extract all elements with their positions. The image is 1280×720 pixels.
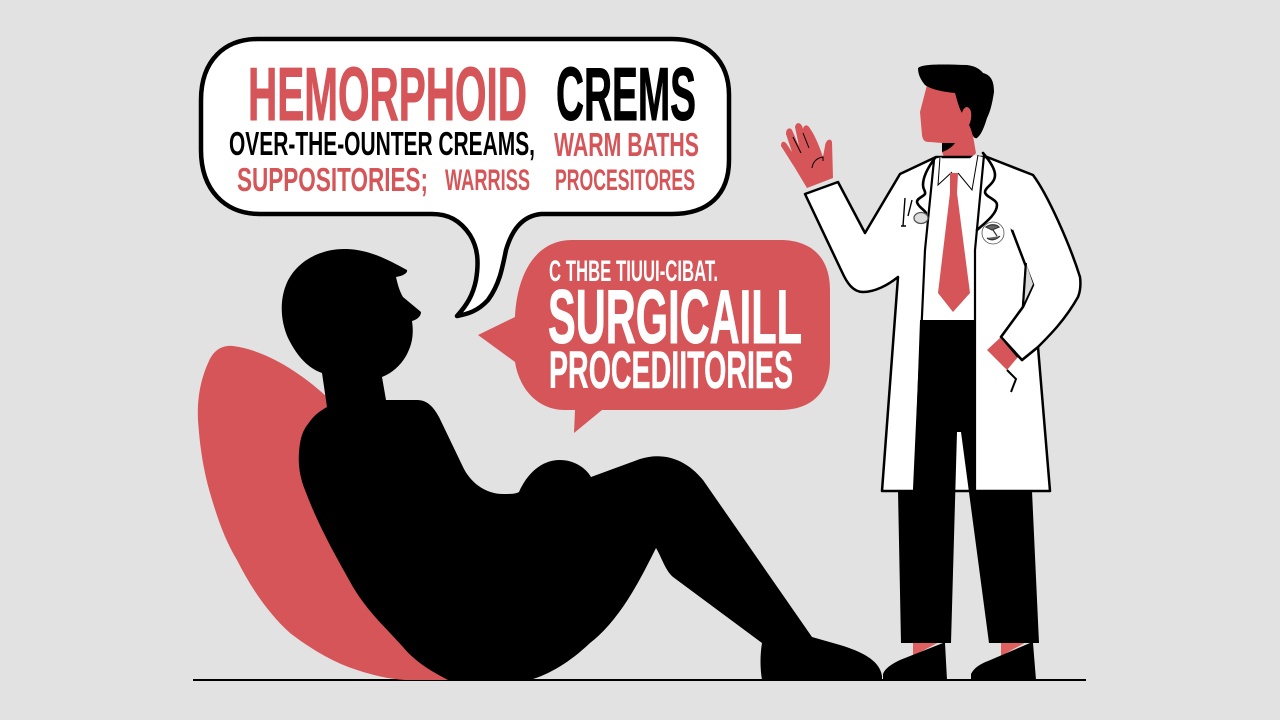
red speech bubble xyxy=(478,240,830,433)
doctor socks xyxy=(913,640,1030,656)
doctor beard xyxy=(942,143,955,152)
doctor hair xyxy=(918,64,994,138)
white bubble shape xyxy=(201,39,729,316)
tie xyxy=(938,173,970,312)
doctor neck and face xyxy=(920,80,985,175)
coat pocket pens xyxy=(901,198,912,226)
text: warm baths: WARM BATHS xyxy=(554,126,699,163)
heading: surgicaill: SURGICAILL xyxy=(548,275,802,360)
cuff and pocket line xyxy=(1001,337,1018,392)
white speech bubble xyxy=(201,39,729,316)
doctor coat xyxy=(805,157,1050,491)
coat right sleeve outline xyxy=(987,157,1080,360)
collar xyxy=(938,155,978,190)
palm lines xyxy=(793,133,823,168)
doctor hand in pocket xyxy=(987,337,1018,370)
heading: procediitories: PROCEDIITORIES xyxy=(549,341,793,400)
coat right sleeve xyxy=(985,157,1080,360)
stethoscope xyxy=(917,153,997,230)
text: procesitores: PROCESITORES xyxy=(555,164,695,197)
doctor raised hand xyxy=(781,123,833,188)
red bubble shape xyxy=(478,240,830,433)
doctor figure xyxy=(781,64,1080,680)
text: over-the-counter creams: OVER-THE-OUNTER CREAMS, xyxy=(229,125,535,162)
ground line xyxy=(193,679,1086,681)
coat badge xyxy=(982,222,1004,244)
text: suppositories: SUPPOSITORIES; xyxy=(237,161,428,198)
shirt xyxy=(920,155,983,320)
heading: hemorphoid: HEMORPHOID xyxy=(248,52,527,136)
patient silhouette xyxy=(282,249,882,680)
text: small line: C THBE TIUUI-CIBAT. xyxy=(549,255,718,288)
stethoscope chest piece xyxy=(914,212,928,224)
red cushion xyxy=(198,346,448,680)
doctor shoes xyxy=(883,643,1036,680)
heading: crems: CREMS xyxy=(556,52,696,136)
coat front edges xyxy=(914,155,984,491)
coat side line at waist xyxy=(1023,263,1026,307)
doctor trousers xyxy=(898,320,1039,643)
doctor ear xyxy=(962,108,971,124)
text: warriss: WARRISS xyxy=(445,164,530,197)
gap between arm and coat xyxy=(1023,263,1033,305)
